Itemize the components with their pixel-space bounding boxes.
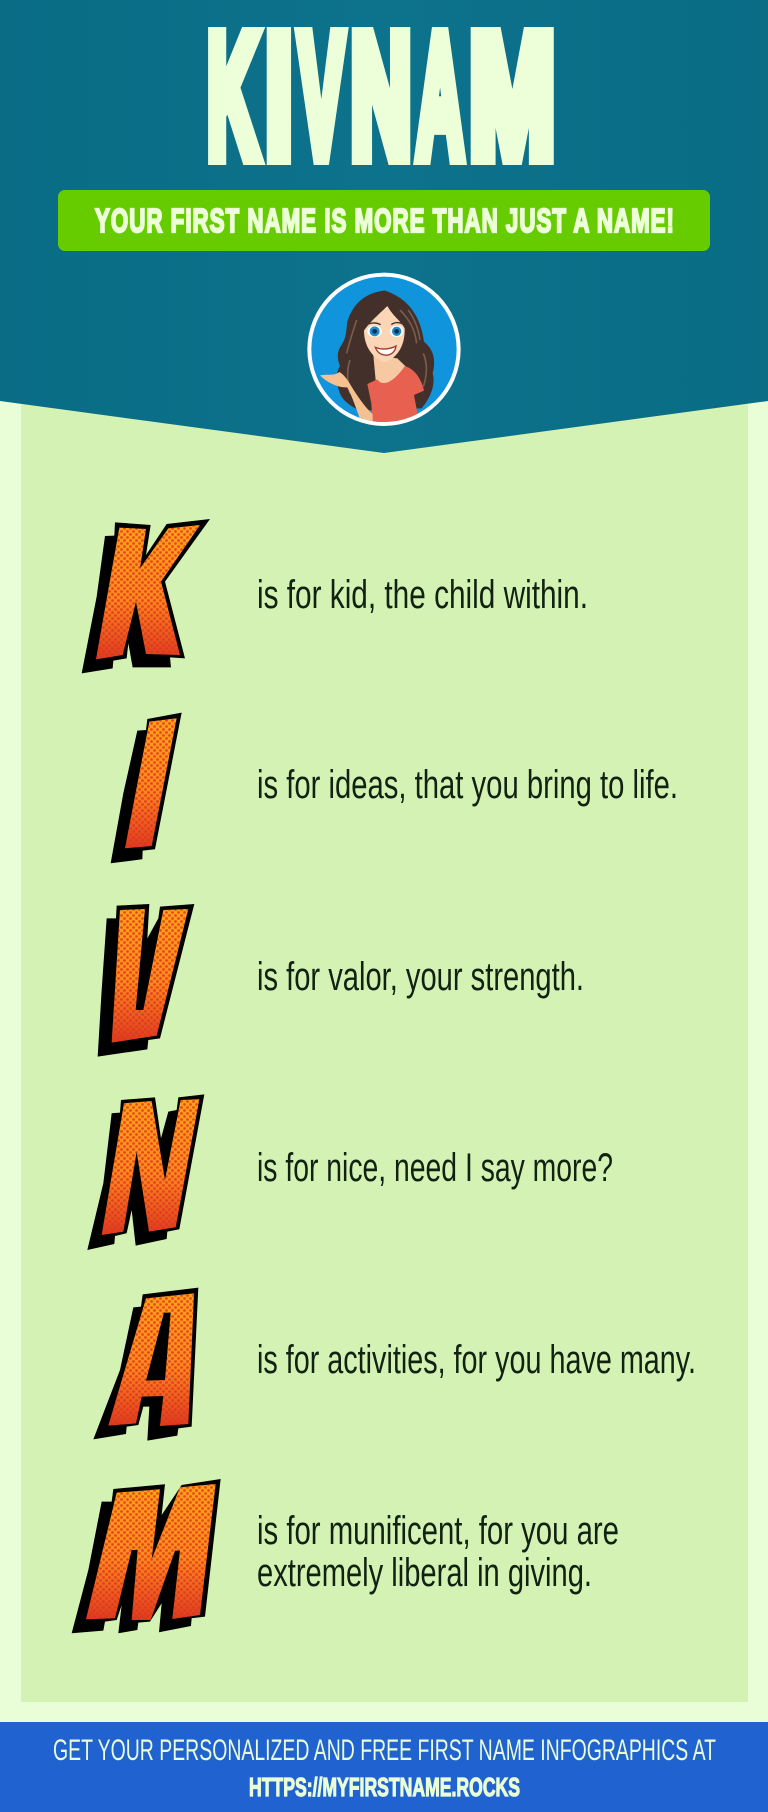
letter A (93, 1288, 198, 1441)
icon: avatar woman portrait (307, 273, 461, 426)
title: N (351, 0, 411, 192)
text: M lines (257, 1509, 619, 1595)
panel: header banner (0, 0, 768, 453)
letter I (111, 713, 182, 863)
text: K line: is for kid, the child within. (257, 573, 588, 617)
footer bar: HTTPS://MYFIRSTNAME.ROCKS (249, 1772, 520, 1802)
title: K (208, 0, 258, 192)
panel: letters background (21, 390, 748, 1702)
text: M lines: is for munificent, for you are (257, 1509, 619, 1553)
title (208, 0, 555, 192)
title: A (417, 1, 463, 192)
text: N line: is for nice, need I say more? (257, 1146, 613, 1190)
letter N (87, 1094, 204, 1250)
text: M lines: extremely liberal in giving. (257, 1551, 592, 1595)
title: M (470, 0, 555, 191)
letter M (72, 1479, 221, 1633)
footer bar (0, 1722, 768, 1812)
title: I (266, 1, 292, 192)
letter K (82, 519, 210, 673)
letter V (98, 904, 194, 1057)
text: V line: is for valor, your strength. (257, 955, 584, 999)
title: V (299, 0, 344, 192)
tagline banner (58, 190, 710, 251)
